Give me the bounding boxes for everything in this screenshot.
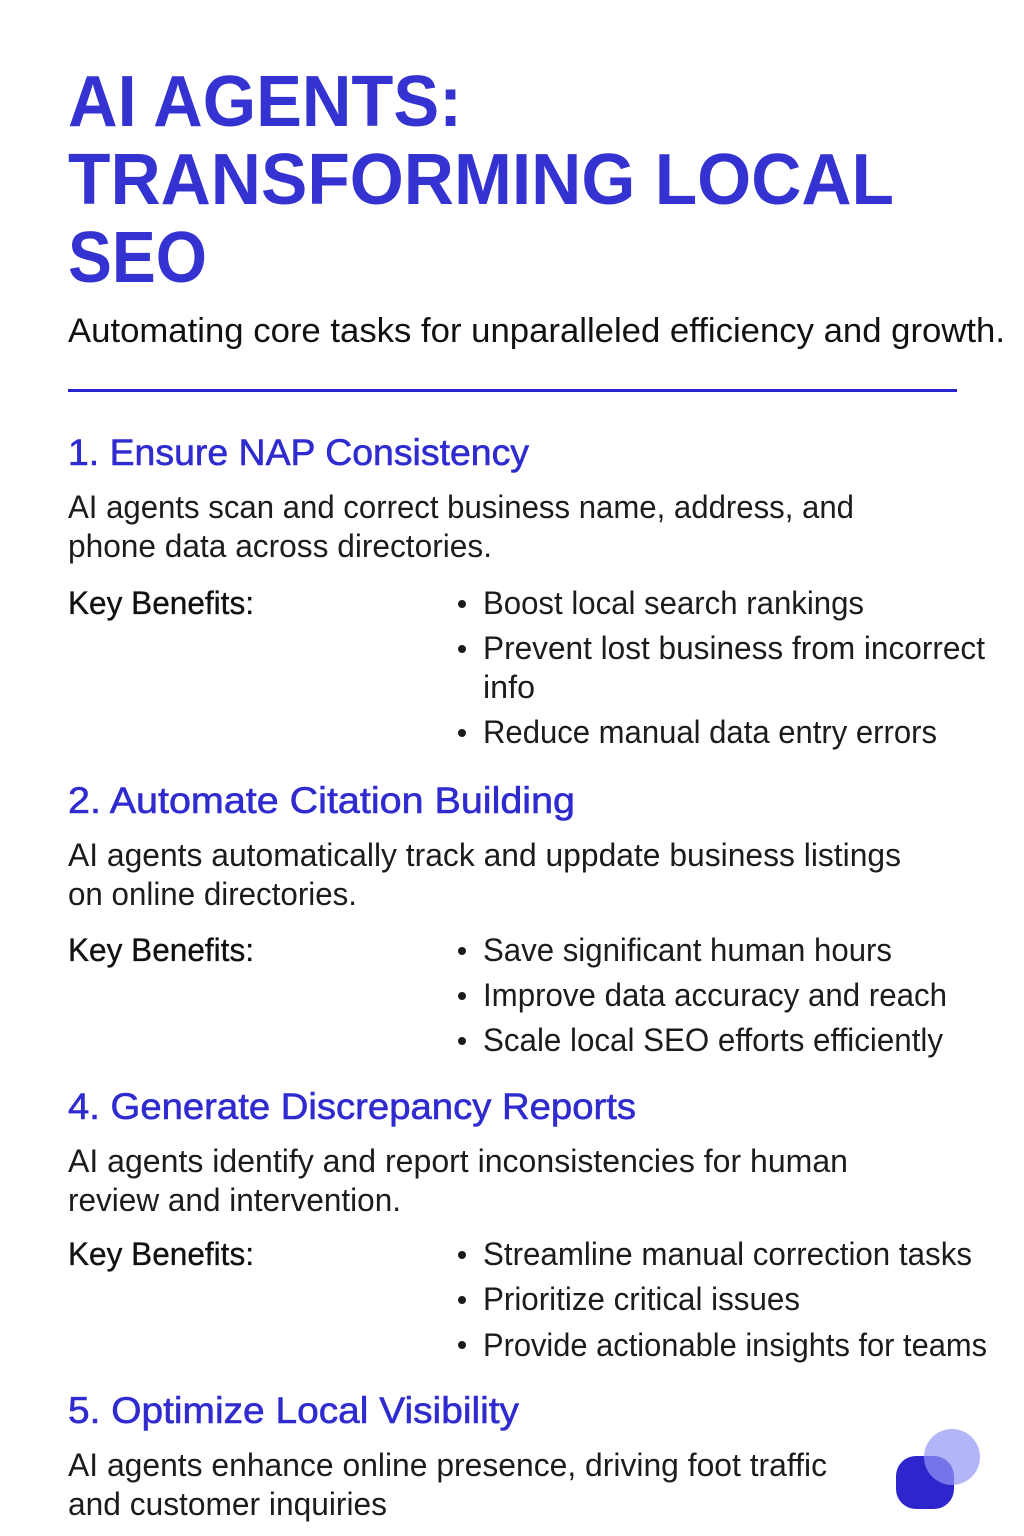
section 1 benefits list [458,585,985,750]
section 2 benefits list: Improve data accuracy and reach [483,977,947,1013]
section 4 description: AI agents identify and report inconsistencies for human [68,1143,848,1179]
section 5 description: and customer inquiries [68,1486,387,1522]
subtitle: Automating core tasks for unparalleled efficiency and growth. [68,312,1005,350]
section 2 key benefits label: Key Benefits: [68,932,254,968]
section 4 benefits list: Provide actionable insights for teams [483,1327,987,1363]
section 1 description [68,489,854,564]
section 1 description: AI agents scan and correct business name, address, and [68,489,854,525]
section 4 heading: 4. Generate Discrepancy Reports [68,1086,636,1127]
icon: overlapping rounded square and circle logo [896,1429,980,1509]
section 1 key benefits label: Key Benefits: [68,585,254,621]
title: SEO [68,218,207,298]
section 4: Generate Discrepancy Reports [68,1086,987,1363]
section 5 heading: 5. Optimize Local Visibility [68,1390,520,1431]
section 4 description [68,1143,848,1218]
section 1 benefits list: Prevent lost business from incorrect [483,630,985,666]
section 4 description: review and intervention. [68,1182,401,1218]
section 2: Automate Citation Building [68,780,947,1058]
section 4 benefits list: Streamline manual correction tasks [483,1236,972,1272]
section 5: Optimize Local Visibility [68,1390,827,1522]
section 1 heading: 1. Ensure NAP Consistency [68,432,530,473]
title: TRANSFORMING LOCAL [68,140,894,220]
section 2 description: on online directories. [68,876,357,912]
section 4 benefits list [458,1236,987,1363]
section 1 benefits list: info [483,669,535,705]
section 1 benefits list: Boost local search rankings [483,585,864,621]
section 2 heading: 2. Automate Citation Building [68,780,575,821]
section 1: Ensure NAP Consistency [68,432,985,750]
section 2 benefits list: Scale local SEO efforts efficiently [483,1022,943,1058]
section 5 description: AI agents enhance online presence, driving foot traffic [68,1447,827,1483]
section 1 description: phone data across directories. [68,528,492,564]
section 4 key benefits label: Key Benefits: [68,1236,254,1272]
section 2 benefits list: Save significant human hours [483,932,892,968]
title: AI AGENTS: [68,62,462,142]
section 4 benefits list: Prioritize critical issues [483,1281,800,1317]
title [68,62,894,298]
section 5 description [68,1447,827,1522]
section 2 description: AI agents automatically track and uppdate business listings [68,837,901,873]
section 2 description [68,837,901,912]
section 1 benefits list: Reduce manual data entry errors [483,714,937,750]
section 2 benefits list [458,932,947,1058]
